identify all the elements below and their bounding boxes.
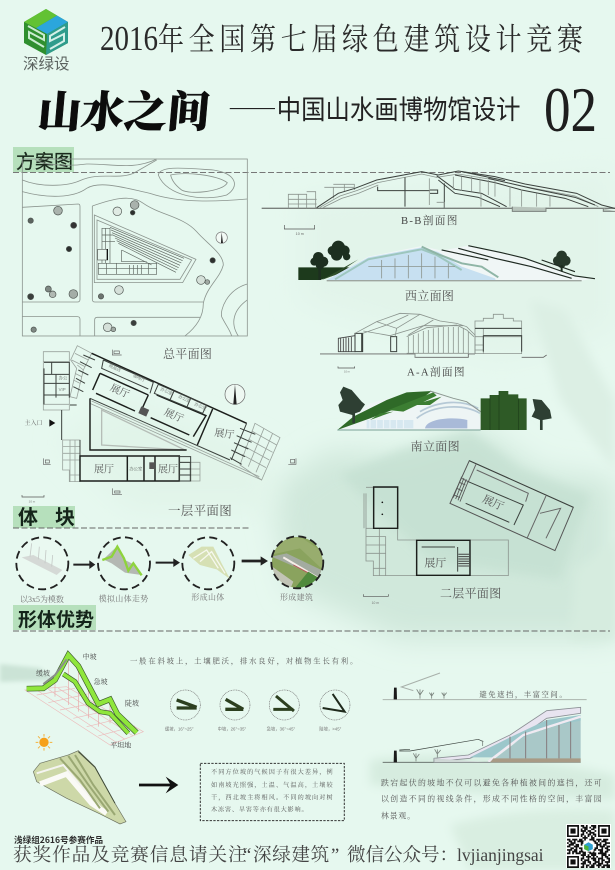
scale bar [22, 495, 44, 503]
mountain massing [33, 751, 126, 824]
building block in green [481, 391, 527, 430]
paragraph: undulating terrain [381, 777, 602, 820]
step 1: grid module: 以3x5为模数 [20, 594, 64, 604]
heading: form advantages: 形体优势 [18, 605, 94, 632]
scale bar [363, 594, 388, 605]
step 2: simulate mountain: 模拟山体走势 [99, 594, 149, 604]
slope icons: 急坡，36°~45° [267, 726, 296, 733]
subtitle: ——中国山水画博物馆设计 [228, 89, 521, 127]
slope diagram: 平坦地 [110, 741, 131, 750]
scale bar: 10 m [344, 370, 351, 374]
ground floor: small room labels: 咖啡厅 [132, 372, 147, 384]
logo: green cube and name: 深绿设 [23, 55, 70, 73]
upper sightline diagram [383, 673, 587, 700]
logo: green cube and name [23, 9, 70, 73]
ground floor: small room labels: 办公 [59, 375, 68, 382]
paragraph: undulating terrain: 以创造不同的视线条件，形成不同性格的空间，丰富园 [381, 794, 602, 805]
A-A section [320, 313, 547, 379]
ground floor: hall labels: 展厅 [214, 427, 235, 441]
slope diagram [25, 652, 143, 750]
main entrance marker [25, 419, 55, 427]
second floor plan [363, 461, 573, 605]
scale bar: 10 m [372, 601, 379, 605]
slope icons: 中坡，26°~35° [218, 726, 247, 733]
ground floor: walls [44, 353, 255, 482]
section marks [43, 350, 296, 494]
B-B section [262, 171, 615, 236]
step 1: grid module [16, 537, 68, 604]
caption: south elevation: 南立面图 [411, 438, 460, 453]
footer: follow notice: ” [331, 845, 339, 866]
heading: scheme drawings: 方案图 [16, 151, 73, 173]
site plan [22, 159, 247, 336]
ground floor: small room labels [59, 362, 208, 472]
arrow [156, 558, 180, 567]
paragraph: undulating terrain: 林景观。 [381, 810, 415, 820]
caption: second floor plan: 二层平面图 [440, 587, 502, 601]
callout: orientation text [200, 763, 344, 821]
heading: scheme drawings [13, 147, 610, 173]
footer: follow notice: lvjianjingsai [457, 845, 544, 865]
slope diagram: 陡坡 [125, 698, 139, 707]
site plan: trees [28, 201, 215, 332]
second floor: rotated hall: 展厅 [480, 493, 506, 513]
step 3: form the mountain: 形成山体 [191, 592, 225, 602]
step 3: form the mountain [182, 537, 234, 602]
icon: sun [36, 734, 52, 751]
slope icons [165, 690, 350, 733]
second floor: lower plan [364, 487, 508, 576]
ground floor: hall labels [94, 382, 235, 476]
footer: follow notice: “ [243, 845, 251, 866]
scale bar [284, 225, 315, 236]
heading: massing: 块 [55, 501, 75, 530]
ground floor: small room labels: 商品店 [108, 362, 123, 374]
site plan: north arrow [216, 232, 227, 243]
scale bar [338, 366, 355, 374]
site plan: building footprint [94, 215, 196, 283]
second floor: lower plan: 展厅 [424, 557, 446, 570]
lower sightline diagram [383, 707, 581, 762]
callout: orientation text: 如南坡光照强，土温、气温高，土壤较 [211, 781, 333, 789]
ground floor: small room labels: 办公室 [193, 400, 208, 412]
north arrow [225, 384, 245, 404]
ground floor plan [22, 346, 296, 503]
footer: follow notice: 微信公众号： [347, 845, 458, 866]
step 4: form the building: 形成建筑 [280, 592, 313, 602]
caption: A-A section: A-A剖面图 [407, 366, 466, 379]
trees [338, 387, 552, 430]
ground floor: hall labels: 展厅 [162, 406, 185, 425]
callout: orientation text: 干，西北坡主将相风。不同的坡向对树 [211, 794, 333, 802]
footer: follow notice: 获奖作品及竞赛信息请关注 [13, 845, 248, 866]
paragraph: undulating terrain: 跌宕起伏的坡地不仅可以避免各种植被间的遮挡，还可 [381, 777, 602, 788]
ground floor: hall labels: 展厅 [158, 464, 178, 476]
ground floor: small room labels: 办公室 [159, 385, 174, 397]
ground floor: hall labels: 展厅 [108, 382, 131, 401]
title: competition name: 2016 [100, 18, 158, 58]
caption: ground floor plan: 一层平面图 [168, 504, 232, 518]
ground floor: light grids and outer bands [43, 346, 280, 482]
callout: orientation text: 不同方位坡的气候因子有很大差异，例 [211, 768, 333, 776]
massing steps [16, 535, 325, 604]
caption: site plan: 总平面图 [163, 347, 212, 361]
slope diagram: 急坡 [94, 677, 108, 686]
scale bar: 10 m [296, 232, 304, 236]
caption: B-B section: B-B剖面图 [401, 214, 459, 227]
ground floor: hall labels: 展厅 [94, 464, 114, 476]
title: competition name: 年全国第七届绿色建筑设计竞赛 [158, 23, 588, 58]
ground floor: small room labels: 办公室 [129, 465, 143, 472]
sheet number: 02 [544, 74, 597, 145]
step 4: form the building [270, 535, 325, 602]
arrow [139, 777, 178, 793]
QR code [566, 824, 611, 868]
slope diagram: 中坡 [83, 652, 97, 661]
west elevation [298, 241, 595, 281]
ground floor: small room labels: 办公室 [177, 393, 192, 405]
heading: massing: 体 [18, 501, 38, 530]
title: project name in brush style: 山水之间 [36, 78, 213, 140]
arrow [73, 560, 95, 569]
main entrance marker: 主入口 [25, 419, 43, 427]
caption: west elevation: 西立面图 [405, 289, 454, 303]
south elevation [337, 387, 552, 453]
slope icons: 陡坡，>45° [319, 726, 342, 733]
arrow [242, 556, 268, 566]
upper sightline diagram: 避免遮挡，丰富空间。 [479, 690, 567, 700]
trees [310, 241, 571, 280]
sightline diagrams [381, 673, 602, 820]
slope text: 一般在斜坡上，土壤肥沃，排水良好，对植物生长有利。 [130, 657, 357, 667]
slope diagram: 缓坡 [36, 668, 50, 677]
scale bar: 10 m [29, 499, 36, 503]
form advantages, left part [25, 652, 357, 824]
footer: follow notice: 深绿建筑 [253, 845, 330, 866]
heading: massing [13, 501, 250, 530]
second floor: rotated hall [450, 461, 573, 551]
callout: orientation text: 木冻害、旱害等亦有很大影响。 [211, 806, 308, 814]
slope icons: 缓坡，16°~25° [165, 726, 194, 733]
step 2: simulate mountain [98, 537, 150, 604]
heading: form advantages [13, 605, 610, 632]
footer: entry number: 浅绿组2616号参赛作品 [14, 834, 103, 846]
ground floor: small room labels: VIP [59, 387, 66, 392]
